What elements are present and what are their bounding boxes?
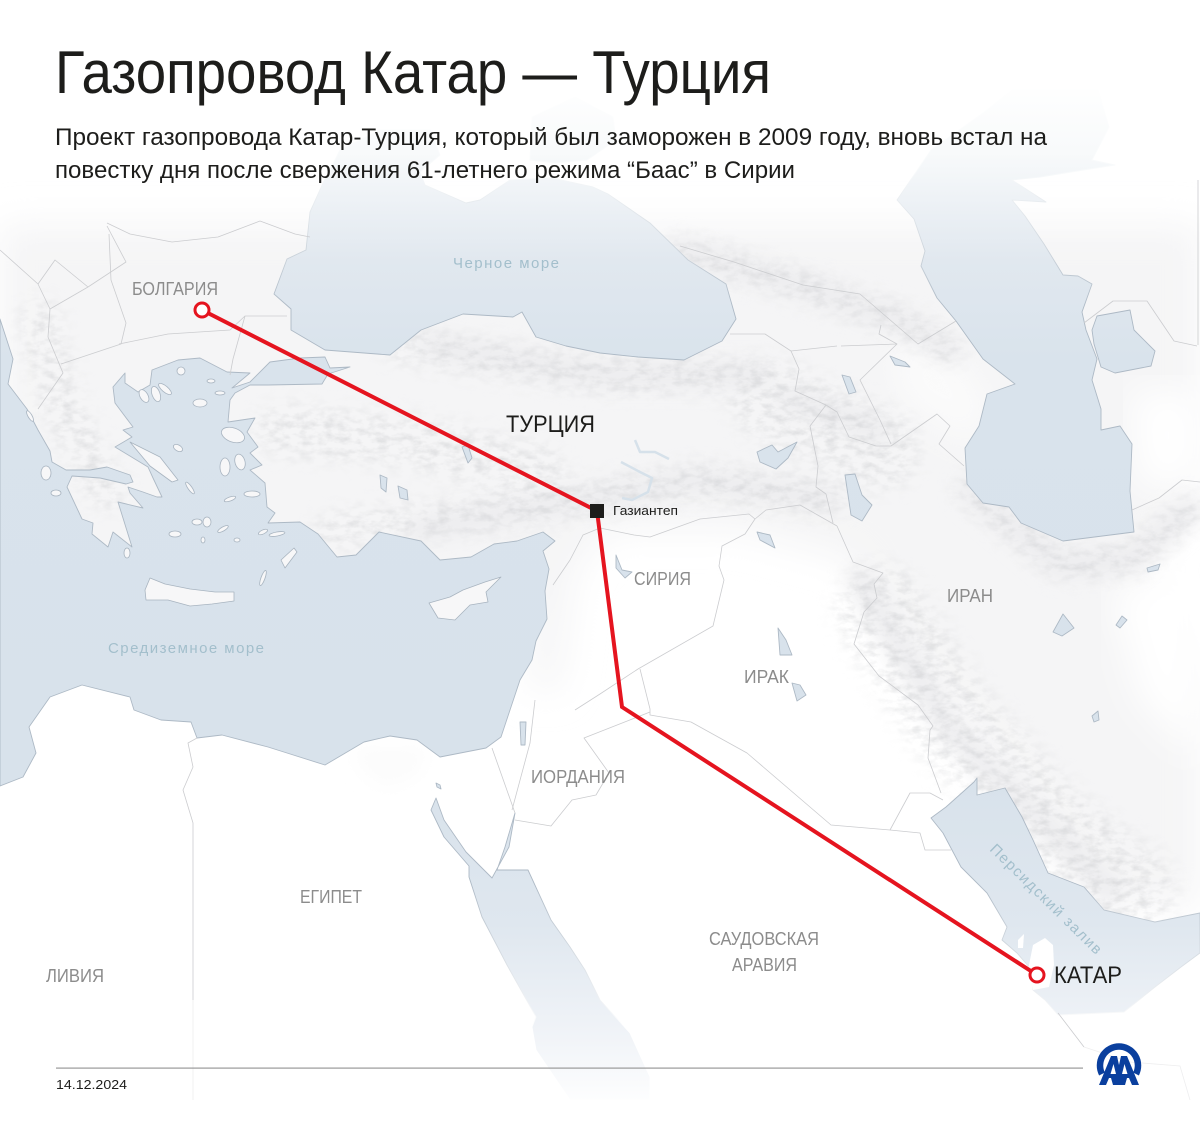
- marker: Gaziantep: [590, 504, 604, 518]
- sea labels: [108, 255, 1105, 958]
- label: Saudi Arabia line 1: САУДОВСКАЯ: [709, 929, 819, 949]
- start marker: Bulgaria: [195, 303, 209, 317]
- Mediterranean, Aegean and Marmara seas: [0, 319, 555, 786]
- faint southern borders: [193, 1000, 1190, 1100]
- Chalkidiki: [137, 382, 173, 404]
- Black Sea: [274, 130, 736, 360]
- lakes: [380, 356, 1160, 789]
- label: Syria: СИРИЯ: [634, 569, 691, 589]
- icon: AA logo: [1099, 1047, 1139, 1085]
- date: 14.12.2024: [56, 1077, 127, 1092]
- Qatar peninsula: [1028, 938, 1054, 990]
- title: Газопровод Катар — Турция: [55, 39, 771, 106]
- label: Black Sea: Черное море: [453, 255, 559, 272]
- label: Persian Gulf: Персидский залив: [986, 841, 1105, 958]
- subtitle line 1: Проект газопровода Катар-Турция, который был заморожен в 2009 году, вновь встал на: [55, 124, 1048, 151]
- islands and peninsulas: [25, 367, 501, 620]
- label: Bulgaria: БОЛГАРИЯ: [132, 279, 218, 299]
- Crete: [145, 578, 234, 606]
- Red Sea: [431, 798, 650, 1100]
- pipeline route: [202, 310, 1037, 975]
- Cyprus: [429, 577, 501, 620]
- label: Mediterranean Sea: Средиземное море: [108, 640, 264, 657]
- reservoirs: [621, 440, 669, 500]
- Aegean islands: [25, 367, 285, 586]
- country borders: [0, 180, 1200, 1047]
- end marker: Qatar: [1030, 968, 1044, 982]
- Persian Gulf: [931, 778, 1200, 1015]
- label: Turkey: ТУРЦИЯ: [506, 411, 595, 438]
- label: Iran: ИРАН: [947, 586, 993, 606]
- Caspian Sea: [897, 90, 1134, 541]
- label: Jordan: ИОРДАНИЯ: [531, 767, 625, 787]
- terrain shading: [0, 225, 1200, 905]
- label: Gaziantep: Газиантеп: [613, 503, 678, 518]
- Sea of Azov: [530, 97, 616, 163]
- footer rule: [56, 1068, 1083, 1069]
- Rhodes: [281, 548, 297, 568]
- label: Saudi Arabia line 2: АРАВИЯ: [732, 955, 797, 975]
- country labels: [46, 279, 993, 986]
- label: Qatar: КАТАР: [1054, 962, 1122, 989]
- label: Iraq: ИРАК: [744, 667, 789, 687]
- label: Egypt: ЕГИПЕТ: [300, 887, 362, 907]
- subtitle line 2: повестку дня после свержения 61-летнего режима “Баас” в Сирии: [55, 157, 795, 184]
- Garabogaz Bay: [1092, 310, 1155, 373]
- label: Libya: ЛИВИЯ: [46, 966, 104, 986]
- Bahrain: [1018, 934, 1024, 948]
- subtitle: [55, 124, 1048, 184]
- Euboea: [130, 442, 178, 482]
